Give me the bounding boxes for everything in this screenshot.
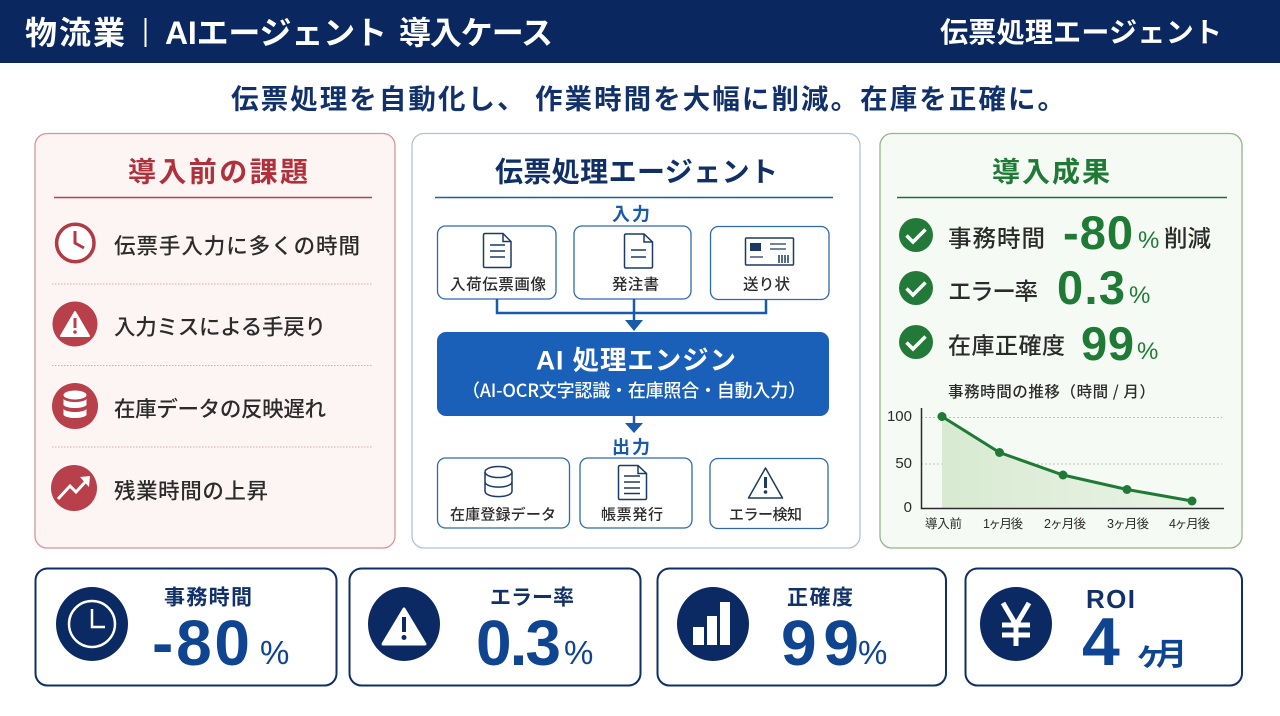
result: error rate: [899, 261, 1150, 314]
header band: [0, 0, 1280, 63]
title: [25, 8, 553, 54]
output: form issue: 帳票発行: [601, 504, 663, 524]
output: stock registration data: [438, 458, 570, 528]
result: office time: 削減: [1164, 220, 1212, 254]
icon: clock: [57, 224, 94, 262]
line chart: office time trend: 1ヶ月後: [983, 517, 1023, 531]
KPI card: office time: %: [260, 634, 289, 671]
KPI card: ROI: ROI: [1086, 584, 1135, 614]
heading: results: 導入成果: [992, 150, 1110, 190]
issue: input errors: [52, 302, 326, 346]
issue: stock data delay: 在庫データの反映遅れ: [114, 392, 326, 424]
label: input: 入力: [612, 200, 650, 226]
result: error rate: 0.3: [1057, 261, 1125, 314]
output: form issue: [580, 458, 692, 528]
result: stock accuracy: [899, 317, 1158, 370]
line chart: office time trend: 0: [904, 499, 912, 516]
result: office time: -80: [1063, 206, 1133, 259]
panel: results: [880, 134, 1242, 548]
KPI card: error rate: 0.3: [476, 607, 561, 679]
icon: warning: [368, 587, 440, 661]
icon: document: [624, 234, 652, 268]
output: error detection: [710, 458, 828, 528]
heading: agent: 伝票処理エージェント: [495, 150, 778, 190]
subtitle: 伝票処理を自動化し、 作業時間を大幅に削減。在庫を正確に。: [231, 76, 1065, 116]
input: purchase order: 発注書: [612, 272, 659, 294]
icon: check: [899, 325, 933, 359]
panel: before issues: [35, 134, 395, 548]
icon: database: [485, 466, 512, 497]
title: 物流業: [25, 8, 125, 54]
line chart: office time trend: 4ヶ月後: [1169, 517, 1210, 531]
KPI card: accuracy: 99: [781, 607, 859, 679]
icon: check: [899, 271, 933, 305]
issue: manual entry: 伝票手入力に多くの時間: [114, 230, 360, 260]
issue: input errors: 入力ミスによる手戻り: [114, 310, 326, 342]
issue: stock data delay: [52, 383, 326, 429]
icon: database: [52, 383, 98, 429]
header agent name: 伝票処理エージェント: [940, 11, 1222, 51]
icon: check: [899, 218, 933, 252]
arrow: engine to outputs: [625, 416, 643, 433]
KPI card: ROI: ヶ月: [1135, 629, 1187, 674]
result: error rate: エラー率: [948, 272, 1038, 306]
result: stock accuracy: %: [1137, 338, 1158, 365]
KPI card: office time: -80: [152, 607, 250, 679]
output: stock registration data: 在庫登録データ: [450, 504, 556, 524]
result: office time: [899, 206, 1212, 259]
issue: overtime rising: 残業時間の上昇: [114, 474, 268, 506]
KPI card: ROI: [966, 568, 1242, 686]
icon: bar chart: [677, 587, 749, 661]
panel: agent flow: [412, 134, 860, 548]
line chart: office time trend: 導入前: [925, 516, 962, 531]
icon: clock: [56, 587, 128, 661]
icon: waybill card: [746, 238, 794, 265]
result: stock accuracy: 99: [1081, 317, 1134, 370]
line chart: office time trend: 50: [895, 455, 912, 472]
KPI card: error rate: エラー率: [490, 582, 574, 612]
input: arrival slip image: [438, 226, 556, 299]
heading: before issues: 導入前の課題: [128, 150, 308, 190]
icon: document: [618, 466, 646, 500]
input: purchase order: [574, 226, 691, 299]
icon: document: [484, 234, 511, 268]
line chart: office time trend: 3ヶ月後: [1107, 517, 1149, 531]
input: arrival slip image: 入荷伝票画像: [450, 272, 546, 294]
input: waybill: 送り状: [743, 272, 790, 294]
issue: manual entry: [57, 224, 360, 262]
icon: warning outline: [748, 468, 782, 498]
KPI card: error rate: [350, 568, 640, 686]
result: stock accuracy: 在庫正確度: [948, 326, 1065, 360]
KPI card: error rate: %: [564, 634, 593, 671]
AI processing engine: [437, 332, 829, 416]
title: AIエージェント: [165, 15, 387, 51]
title: 導入ケース: [399, 8, 553, 54]
KPI card: office time: 事務時間: [164, 582, 252, 612]
output: error detection: エラー検知: [729, 504, 802, 524]
line chart: office time trend: 100: [887, 408, 912, 425]
result: office time: 事務時間: [948, 220, 1045, 254]
chart title: 事務時間の推移（時間 / 月）: [948, 380, 1155, 402]
line chart: office time trend: 2ヶ月後: [1044, 517, 1086, 531]
result: office time: %: [1138, 227, 1159, 254]
KPI card: accuracy: [658, 568, 946, 686]
arrow: inputs to engine: [497, 299, 766, 331]
KPI card: office time: [36, 568, 336, 686]
icon: warning: [52, 302, 98, 346]
input: waybill: [710, 226, 829, 300]
issue: overtime rising: [51, 465, 268, 511]
line chart: office time trend: [887, 380, 1224, 531]
label: output: 出力: [612, 434, 650, 460]
KPI card: ROI: 4: [1082, 604, 1120, 680]
AI processing engine: AI 処理エンジン: [536, 346, 736, 376]
AI processing engine: （AI-OCR文字認識・在庫照合・自動入力）: [462, 377, 806, 403]
KPI card: accuracy: 正確度: [787, 582, 853, 612]
icon: trend arrow: [51, 465, 97, 511]
icon: yen: [980, 587, 1052, 661]
result: error rate: %: [1129, 282, 1150, 309]
KPI card: accuracy: %: [858, 634, 887, 671]
